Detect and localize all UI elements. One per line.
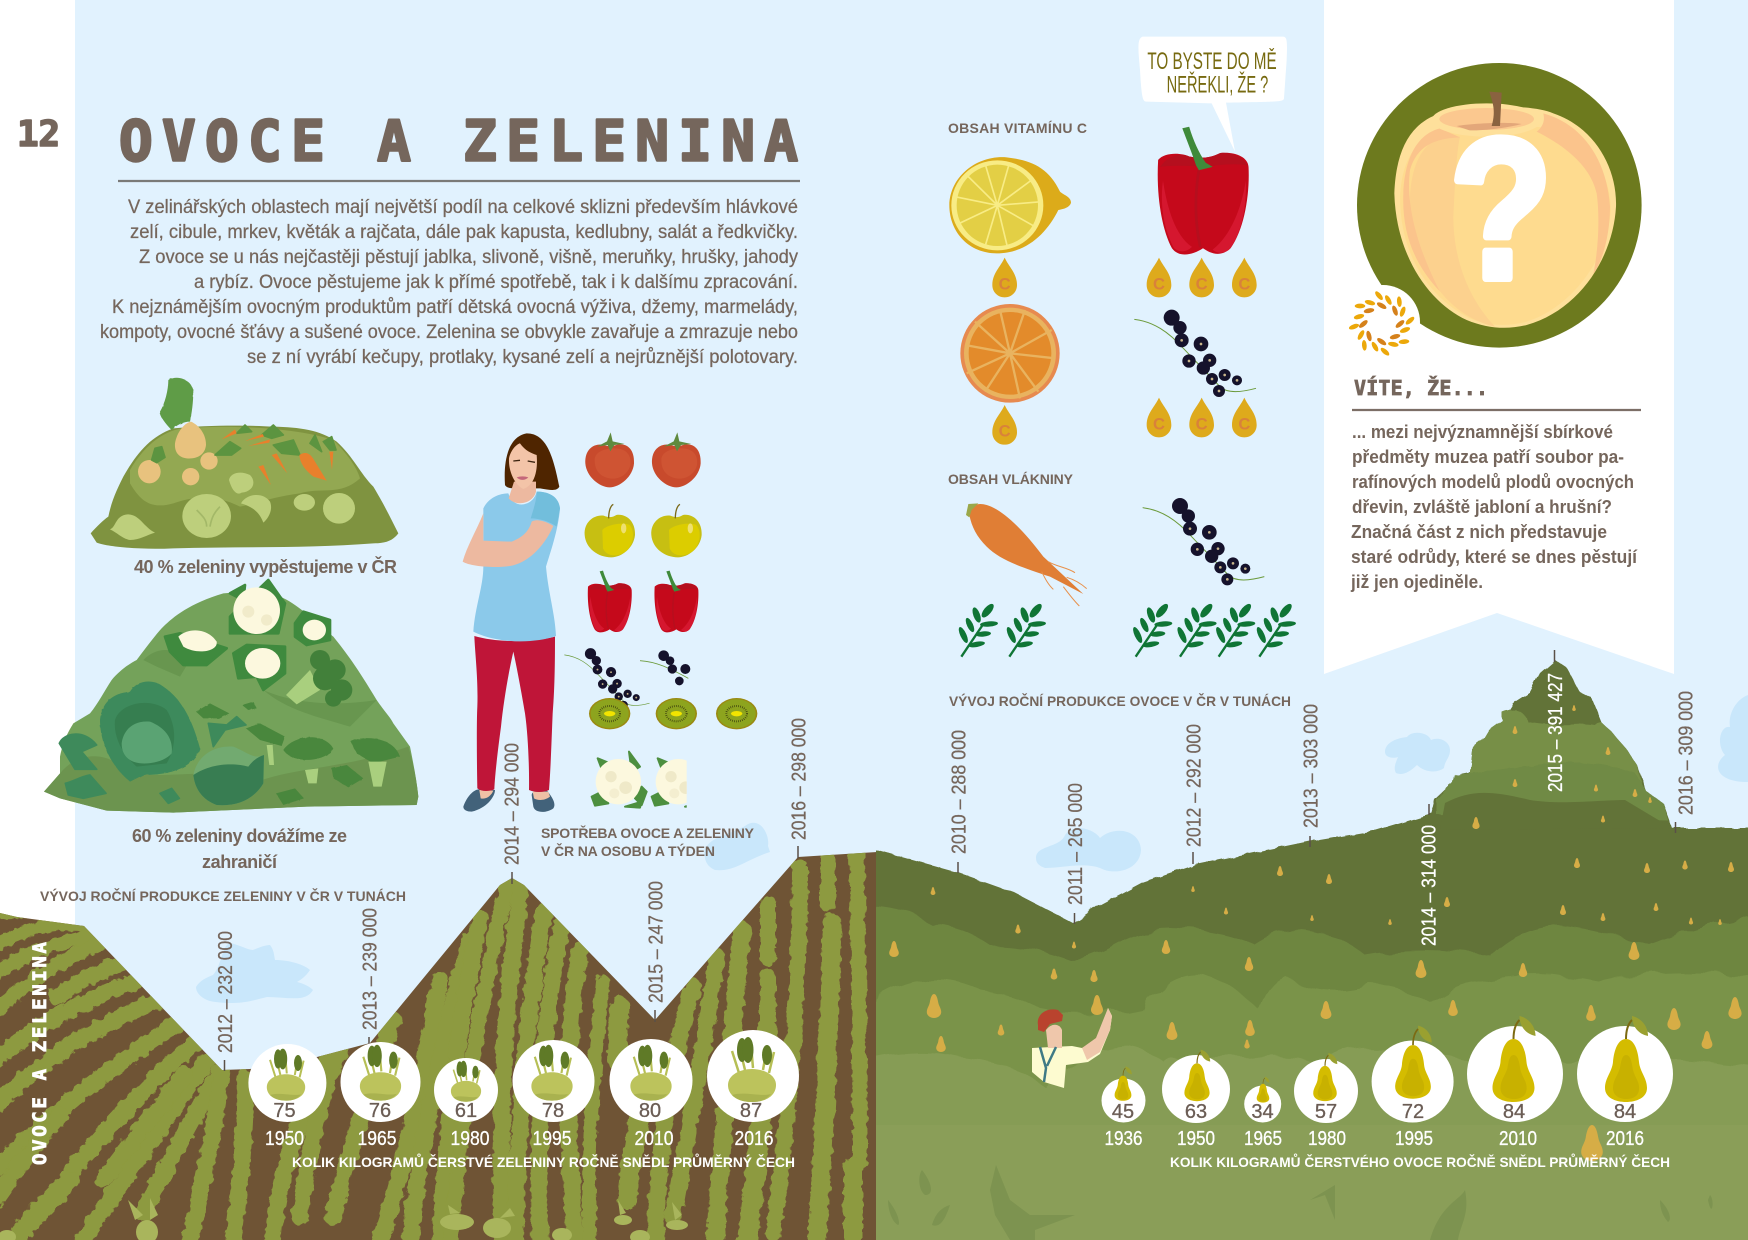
speech bubble: TO BYSTE DO MĚ (1147, 48, 1277, 75)
caption: 60 %: zahraničí (202, 852, 278, 872)
bubble 1936 (1102, 1066, 1146, 1150)
orange (960, 304, 1060, 403)
hill: peak middle band (1437, 762, 1668, 820)
bubble 1980: 1980 (1308, 1128, 1346, 1150)
currants (1143, 498, 1264, 585)
bubble 1980: 1980 (450, 1128, 490, 1150)
label 2011: 2011 – 265 000 (1065, 783, 1087, 905)
label 2010: 2010 – 288 000 (948, 730, 970, 854)
panel: fibre content (957, 498, 1296, 657)
panel: vitamin C content (949, 37, 1287, 445)
apple with question mark (1357, 63, 1642, 348)
hill: peak dark base (1440, 793, 1672, 830)
bubble 2016 (707, 1030, 799, 1150)
red pepper (1158, 127, 1249, 255)
hill: peak upper band (1460, 710, 1642, 785)
bubble 1980 (434, 1058, 498, 1150)
plants along the bottom of the field (0, 1198, 688, 1240)
icon: golden wreath (1346, 285, 1420, 359)
bubble 2010: 2010 (634, 1128, 674, 1150)
vegetable: red peppers (588, 571, 698, 632)
heading: vitamin C: OBSAH VITAMÍNU C (948, 120, 1087, 136)
bubble 2010 (610, 1039, 692, 1150)
vitamin C drops: C (1238, 274, 1250, 293)
figure: woman with crossed arms (463, 433, 560, 812)
currants (1134, 310, 1256, 397)
vitamin C drops: C (999, 422, 1011, 441)
bubble 2010: 80 (639, 1100, 661, 1122)
did you know text: rafínových modelů plodů ovocných (1352, 471, 1634, 492)
small fallen pears on hills (889, 705, 1742, 1161)
vitamin C drops: C (1238, 414, 1250, 433)
bubble 1965 (340, 1042, 420, 1150)
fruit consumption chart (1102, 1016, 1673, 1150)
did you know text (1350, 421, 1638, 592)
bubble 1965: 1965 (358, 1128, 396, 1150)
bubble 1965 (1244, 1077, 1282, 1150)
bubble 1950: 1950 (1177, 1128, 1215, 1150)
orchard foreground (876, 1125, 1748, 1240)
apple with question mark: ? (1450, 98, 1552, 321)
label 2012: 2012 – 292 000 (1184, 724, 1206, 847)
section side label: OVOCE A ZELENINA (29, 941, 51, 1165)
bubble 2016 (1577, 1016, 1673, 1150)
bubble 1980: 61 (455, 1100, 477, 1122)
bubble 1936: 1936 (1104, 1128, 1142, 1150)
heading: fibre: OBSAH VLÁKNINY (948, 471, 1074, 487)
heading: vegetable production: VÝVOJ ROČNÍ PRODUKCE ZELENINY V ČR V TUNÁCH (40, 887, 406, 904)
bubble 1995 (1372, 1026, 1454, 1150)
label 2015: 2015 – 391 427 (1545, 673, 1567, 792)
bubble 2016: 87 (740, 1100, 762, 1122)
vegetable mounds panel (44, 378, 418, 813)
did you know text: předměty muzea patří soubor pa- (1352, 446, 1624, 467)
bubble 1950 (1162, 1050, 1230, 1150)
label 2016: 2016 – 298 000 (788, 718, 810, 840)
did you know text: dřevin, zvláště jabloní a hrušní? (1352, 496, 1612, 517)
fibre sprigs (957, 602, 1296, 657)
orchard hills (860, 660, 1748, 1240)
clouds (196, 695, 1748, 1003)
title: OVOCE A ZELENINA (119, 110, 798, 174)
bubble 1965: 76 (369, 1100, 391, 1122)
speech bubble (1138, 37, 1287, 152)
did you know text: staré odrůdy, které se dnes pěstují (1351, 546, 1638, 567)
mound: imported vegetables (44, 580, 418, 813)
bubble 1995: 72 (1402, 1101, 1424, 1123)
intro paragraph: K nejznámějším ovocným produktům patří dětská ovocná výživa, džemy, marmelády, (112, 297, 798, 318)
bubble 1950: 1950 (265, 1128, 304, 1150)
vegetable: cauliflowers (590, 750, 687, 809)
bubble 1950: 75 (273, 1100, 296, 1122)
label 2013: 2013 – 239 000 (360, 908, 382, 1030)
white info banner (1324, 0, 1674, 674)
bubble 2016: 2016 (734, 1128, 774, 1150)
vitamin C drops: C (1153, 414, 1165, 433)
caption: weekly consumption: V ČR NA OSOBU A TÝDEN (541, 842, 715, 859)
fruit: apples (585, 504, 702, 557)
vegetable chart caption: KOLIK KILOGRAMŮ ČERSTVÉ ZELENINY ROČNĚ SNĚDL PRŮMĚRNÝ ČECH (292, 1152, 795, 1170)
vegetable field (0, 840, 880, 1240)
intro paragraph: V zelinářských oblastech mají největší podíl na celkové sklizni především hlávkové (128, 197, 798, 218)
fruit: tomatoes (585, 432, 701, 487)
caption: 60 % (132, 826, 347, 872)
intro paragraph: zelí, cibule, mrkev, květák a rajčata, dále pak kapusta, kedlubny, salát a ředkvičky. (130, 222, 798, 243)
bubble 1995: 78 (542, 1100, 564, 1122)
lemon (949, 157, 1071, 253)
bubble 1980: 57 (1315, 1101, 1337, 1123)
bubble 1995: 1995 (1395, 1128, 1433, 1150)
label 2014: 2014 – 294 000 (502, 743, 524, 865)
orchard layer 2 (876, 906, 1748, 1016)
heading: fruit production: VÝVOJ ROČNÍ PRODUKCE OVOCE V ČR V TUNÁCH (949, 692, 1291, 709)
bubble 2010 (1467, 1016, 1563, 1150)
foreground leaf shapes (888, 1165, 1713, 1240)
page number: 12 (17, 114, 60, 155)
did you know text: ... mezi nejvýznamnější sbírkové (1352, 421, 1613, 442)
intro paragraph: kompoty, ovocné šťávy a sušené ovoce. Zelenina se obvykle zavařuje a zmrazuje nebo (100, 322, 798, 343)
bubble 1965: 34 (1251, 1101, 1274, 1123)
bubble 1980 (1294, 1053, 1358, 1150)
intro paragraph: Z ovoce se u nás nejčastěji pěstují jablka, slivoně, višně, meruňky, hrušky, jahody (139, 247, 798, 268)
bubble 1995: 1995 (532, 1128, 572, 1150)
hill: back ridge and peak (876, 660, 1748, 961)
vitamin C drops: C (999, 274, 1011, 293)
label 2012: 2012 – 232 000 (215, 931, 237, 1053)
fruit chart caption: KOLIK KILOGRAMŮ ČERSTVÉHO OVOCE ROČNĚ SNĚDL PRŮMĚRNÝ ČECH (1170, 1152, 1670, 1170)
vegetable consumption chart (248, 1030, 799, 1150)
carrot (966, 503, 1087, 606)
bubble 1950: 63 (1185, 1101, 1207, 1123)
fruit production line: labels (948, 650, 1698, 946)
caption: 60 %: 60 % zeleniny dovážíme ze (132, 826, 347, 846)
bubble 1950 (248, 1044, 326, 1150)
fruit: currants (564, 648, 690, 709)
bubble 2016: 2016 (1606, 1128, 1644, 1150)
bubble 1995 (512, 1040, 594, 1150)
label 2013: 2013 – 303 000 (1300, 704, 1322, 828)
intro paragraph: a rybíz. Ovoce pěstujeme jak k přímé spotřebě, tak i k dalšímu zpracování. (194, 272, 798, 293)
fruit: kiwis (589, 698, 757, 729)
vitamin C drops: C (1153, 274, 1165, 293)
label 2015: 2015 – 247 000 (646, 881, 668, 1003)
did you know text: již jen ojediněle. (1350, 571, 1483, 592)
mound: domestic vegetables (91, 378, 398, 549)
bubble 2010: 2010 (1499, 1128, 1537, 1150)
caption: weekly consumption: SPOTŘEBA OVOCE A ZELENINY (541, 824, 755, 841)
heading: did you know: VÍTE, ŽE... (1354, 376, 1488, 400)
intro paragraph: se z ní vyrábí kečupy, protlaky, kysané zelí a nejrůznější polotovary. (247, 347, 798, 368)
speech bubble: NEŘEKLI, ŽE ? (1167, 72, 1268, 99)
label 2014: 2014 – 314 000 (1418, 825, 1440, 946)
orchard layer 4 (876, 1046, 1748, 1125)
figure: farmer picking a pear (1032, 1008, 1112, 1088)
bubble 1936: 45 (1112, 1101, 1134, 1123)
vitamin C drops (992, 258, 1257, 445)
vitamin C drops: C (1196, 274, 1208, 293)
label 2016: 2016 – 309 000 (1676, 691, 1698, 815)
orchard layer 3 (876, 970, 1748, 1088)
caption: 40 %: 40 % zeleniny vypěstujeme v ČR (134, 556, 397, 577)
bubble 2010: 84 (1503, 1101, 1525, 1123)
vitamin C drops: C (1196, 414, 1208, 433)
vegetable production line: labels (215, 718, 810, 1071)
bubble 1965: 1965 (1244, 1128, 1282, 1150)
did you know text: Značná část z nich představuje (1351, 521, 1607, 542)
bubble 2016: 84 (1614, 1101, 1636, 1123)
panel: weekly consumption (463, 432, 757, 812)
intro paragraph (100, 197, 798, 368)
caption: weekly consumption (541, 823, 770, 870)
